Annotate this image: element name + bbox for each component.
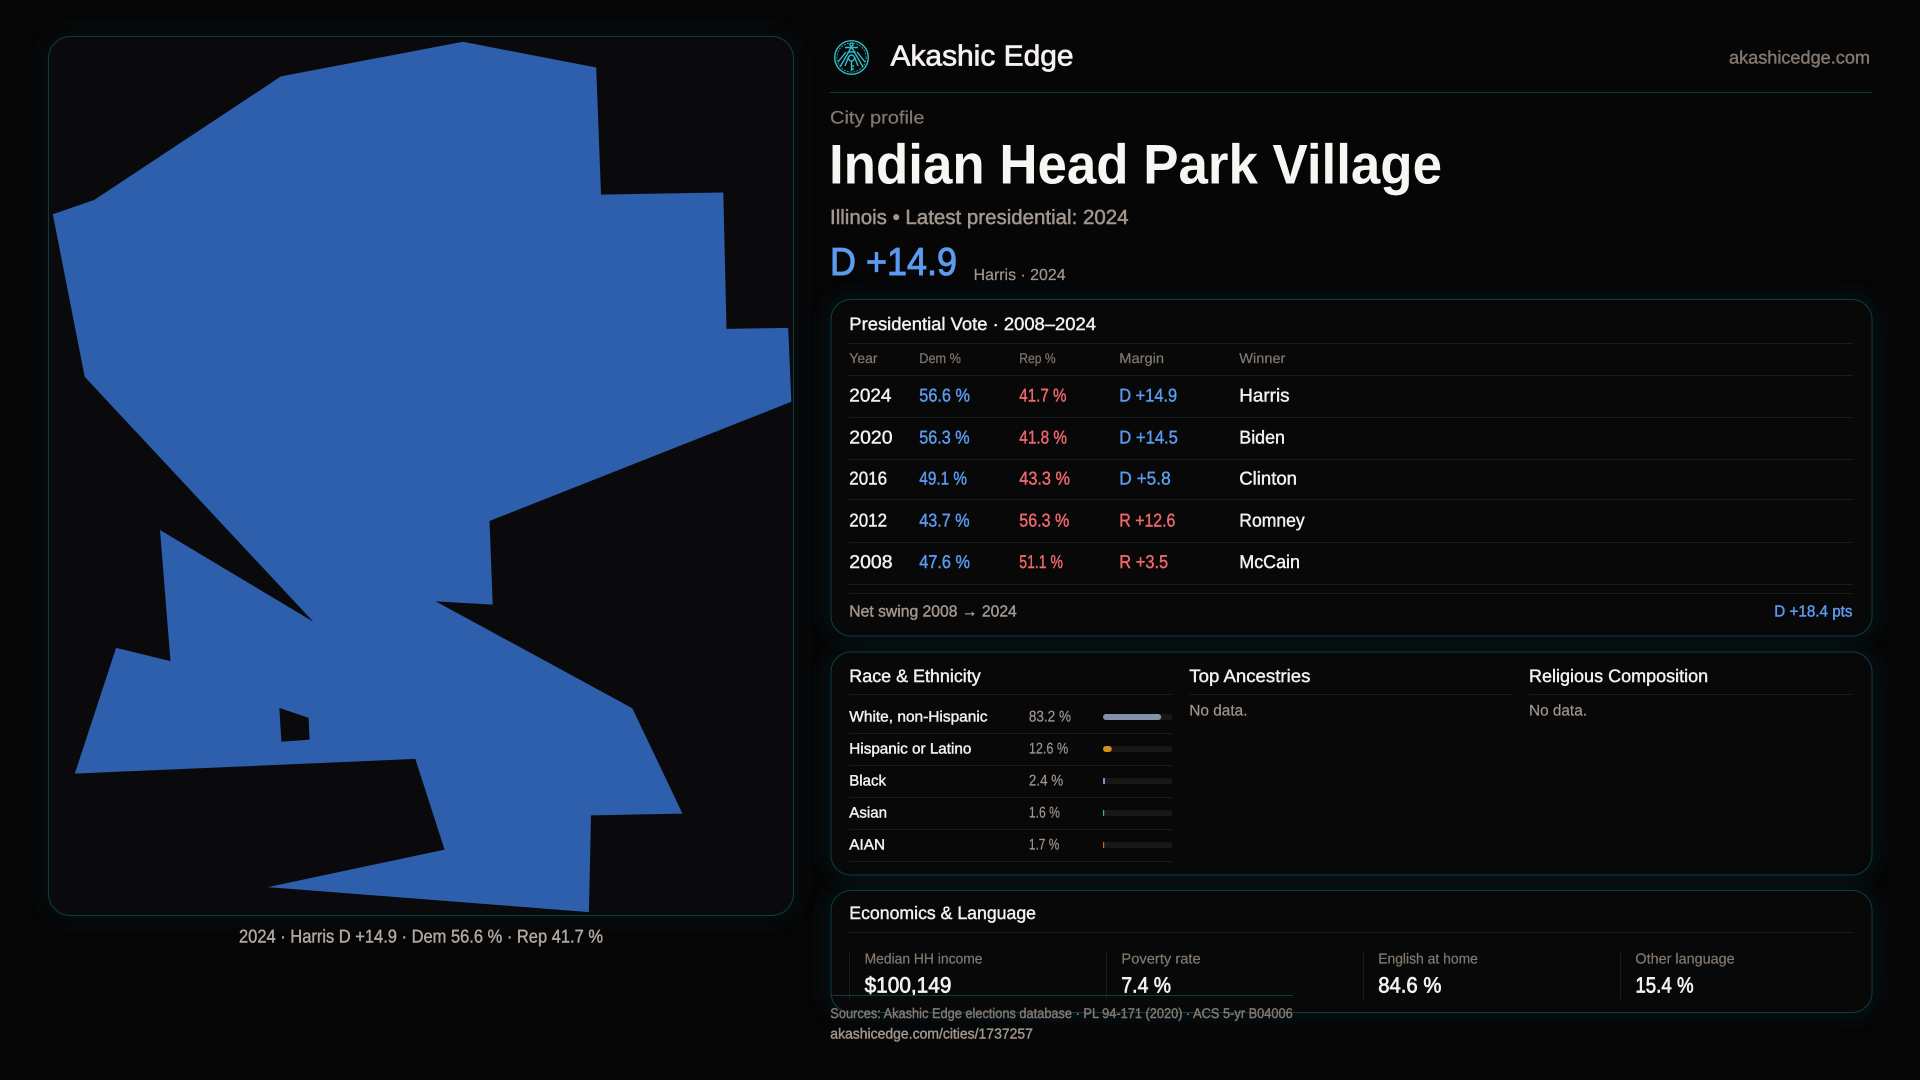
row 2024 — [849, 384, 1290, 406]
panel: presidential vote — [831, 300, 1872, 636]
top ancestries — [1189, 666, 1513, 720]
city boundary map shape — [53, 42, 791, 912]
row 2008: 2008 — [849, 551, 892, 572]
footer: sources: akashicedge.com/cities/1737257 — [830, 1027, 1033, 1043]
table header: Dem % — [919, 350, 961, 366]
row 2024: 2024 — [849, 384, 891, 406]
stat: poverty rate: 7.4 % — [1121, 973, 1171, 998]
race and ethnicity: Race & Ethnicity — [849, 666, 981, 686]
footer: sources: Sources: Akashic Edge elections database · PL 94-171 (2020) · ACS 5-yr B04006 — [830, 1005, 1293, 1021]
race row: white: 83.2 % — [1029, 709, 1071, 726]
table header: Year — [849, 350, 878, 366]
row 2012 — [849, 509, 1305, 530]
stat: english at home: English at home — [1378, 951, 1478, 967]
row 2012: R +12.6 — [1119, 509, 1175, 530]
table header — [849, 350, 1286, 366]
race row: hispanic — [849, 741, 1173, 758]
row 2020: Biden — [1239, 426, 1285, 447]
headline margin: D +14.9 — [830, 241, 957, 284]
row 2016: 2016 — [849, 467, 887, 488]
brand name: Akashic Edge — [890, 40, 1074, 72]
stat: other language — [1620, 951, 1735, 1000]
race and ethnicity — [849, 666, 1173, 862]
row 2012: 56.3 % — [1019, 509, 1069, 530]
map caption: 2024 · Harris D +14.9 · Dem 56.6 % · Rep 41.7 % — [239, 926, 603, 946]
row 2016: 43.3 % — [1019, 467, 1070, 488]
header: brand — [835, 40, 1074, 74]
top ancestries: No data. — [1189, 703, 1248, 720]
row 2024: D +14.9 — [1119, 384, 1177, 406]
row 2020: 56.3 % — [919, 426, 970, 447]
top ancestries: Top Ancestries — [1189, 666, 1310, 686]
row 2024: Harris — [1239, 384, 1290, 406]
race row: aian: 1.7 % — [1029, 837, 1059, 854]
row 2016: D +5.8 — [1119, 467, 1171, 488]
religious composition: Religious Composition — [1529, 666, 1708, 686]
row 2020 — [849, 426, 1285, 447]
panel heading: Economics & Language — [849, 903, 1036, 923]
row 2020: 41.8 % — [1019, 426, 1067, 447]
race row: aian: AIAN — [849, 837, 885, 854]
row 2008 — [849, 551, 1300, 572]
stat: median income: Median HH income — [865, 951, 982, 967]
net swing — [849, 604, 1852, 621]
eyebrow: city profile: City profile — [830, 107, 924, 127]
icon: Akashic Edge logo — [835, 41, 868, 74]
stat: other language: Other language — [1635, 951, 1735, 967]
row 2008: R +3.5 — [1119, 551, 1168, 572]
stat: english at home — [1364, 951, 1478, 1000]
net swing: D +18.4 pts — [1774, 604, 1852, 621]
stat: poverty rate: Poverty rate — [1121, 951, 1201, 967]
religious composition — [1529, 666, 1853, 720]
race row: asian: Asian — [849, 805, 887, 822]
row 2012: 2012 — [849, 509, 887, 530]
table header: Winner — [1239, 350, 1286, 366]
race row: asian — [849, 805, 1173, 822]
panel: economics and language — [831, 890, 1872, 1012]
race row: hispanic: 12.6 % — [1029, 741, 1068, 758]
site url: akashicedge.com — [1729, 48, 1870, 68]
subtitle: Illinois • Latest presidential: 2024 — [830, 206, 1128, 229]
row 2008: McCain — [1239, 551, 1300, 572]
panel: demographics — [831, 652, 1872, 875]
stat: english at home: 84.6 % — [1378, 973, 1441, 998]
race row: white — [849, 709, 1173, 726]
row 2024: 56.6 % — [919, 384, 970, 406]
race row: black: Black — [849, 773, 886, 790]
race row: black — [849, 773, 1173, 790]
race row: aian — [849, 837, 1173, 854]
row 2024: 41.7 % — [1019, 384, 1066, 406]
headline margin: Harris · 2024 — [974, 267, 1066, 284]
row 2016 — [849, 467, 1297, 488]
title: Indian Head Park Village — [829, 132, 1442, 195]
panel: map — [48, 36, 794, 916]
row 2020: 2020 — [849, 426, 892, 447]
race row: white: White, non-Hispanic — [849, 709, 988, 726]
row 2016: Clinton — [1239, 467, 1297, 488]
row 2008: 51.1 % — [1019, 551, 1063, 572]
table header: Rep % — [1019, 350, 1056, 366]
row 2012: Romney — [1239, 509, 1305, 530]
stat: poverty rate — [1106, 951, 1201, 1000]
row 2008: 47.6 % — [919, 551, 970, 572]
net swing: Net swing 2008 → 2024 — [849, 604, 1017, 621]
stat: median income — [850, 951, 982, 1000]
panel heading: Presidential Vote · 2008–2024 — [849, 314, 1096, 334]
headline margin — [830, 241, 1066, 284]
row 2012: 43.7 % — [919, 509, 970, 530]
religious composition: No data. — [1529, 703, 1587, 720]
row 2016: 49.1 % — [919, 467, 967, 488]
race row: hispanic: Hispanic or Latino — [849, 741, 971, 758]
race row: asian: 1.6 % — [1029, 805, 1060, 822]
table header: Margin — [1119, 350, 1164, 366]
row 2020: D +14.5 — [1119, 426, 1178, 447]
footer: sources — [830, 996, 1293, 1043]
stat: median income: $100,149 — [865, 973, 951, 998]
race row: black: 2.4 % — [1029, 773, 1063, 790]
stat: other language: 15.4 % — [1635, 973, 1694, 998]
